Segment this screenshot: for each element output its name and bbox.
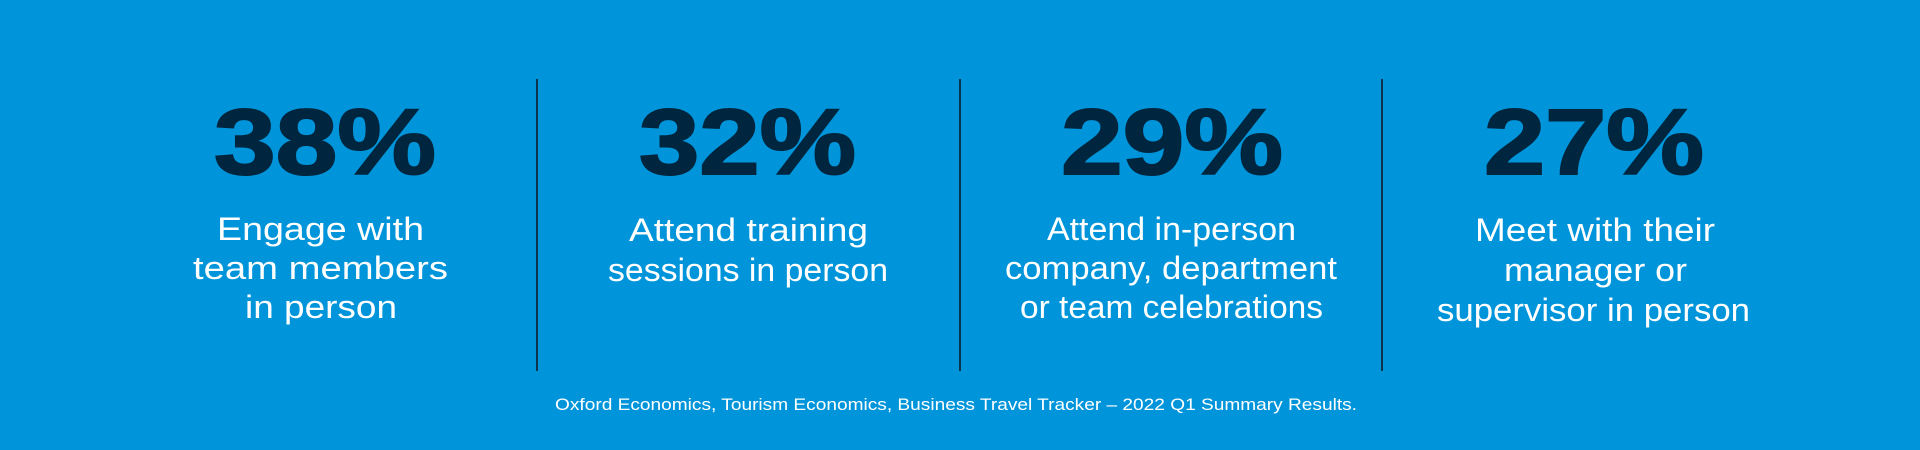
description: meet with manager: manager or [1504,252,1687,288]
number: 32%: 32% [639,90,856,194]
description: attend training sessions: sessions in person [608,252,888,288]
divider 1 [536,79,538,371]
panel: 38% stat [193,90,448,325]
description: attend celebrations: company, department [1005,250,1337,286]
description: meet with manager [1437,212,1750,328]
description: meet with manager: Meet with their [1475,212,1715,248]
panel: 27% stat [1437,90,1750,328]
description: engage with team members: team members [193,250,448,286]
panel: 29% stat [1005,90,1337,325]
panel: 32% stat [608,90,888,288]
divider 2 [959,79,961,371]
divider 3 [1381,79,1383,371]
description: attend training sessions: Attend training [629,212,868,248]
description: attend celebrations [1005,211,1337,325]
description: attend training sessions [608,212,888,288]
description: attend celebrations: or team celebrations [1020,289,1323,325]
description: engage with team members: in person [245,289,397,325]
number: 27%: 27% [1484,90,1704,194]
number: 38%: 38% [214,90,436,194]
description: engage with team members: Engage with [217,211,424,247]
number: 29%: 29% [1061,90,1283,194]
description: engage with team members [193,211,448,325]
source footnote: Oxford Economics, Tourism Economics, Business Travel Tracker – 2022 Q1 Summary Results. [555,395,1357,414]
description: attend celebrations: Attend in-person [1047,211,1296,247]
description: meet with manager: supervisor in person [1437,292,1750,328]
